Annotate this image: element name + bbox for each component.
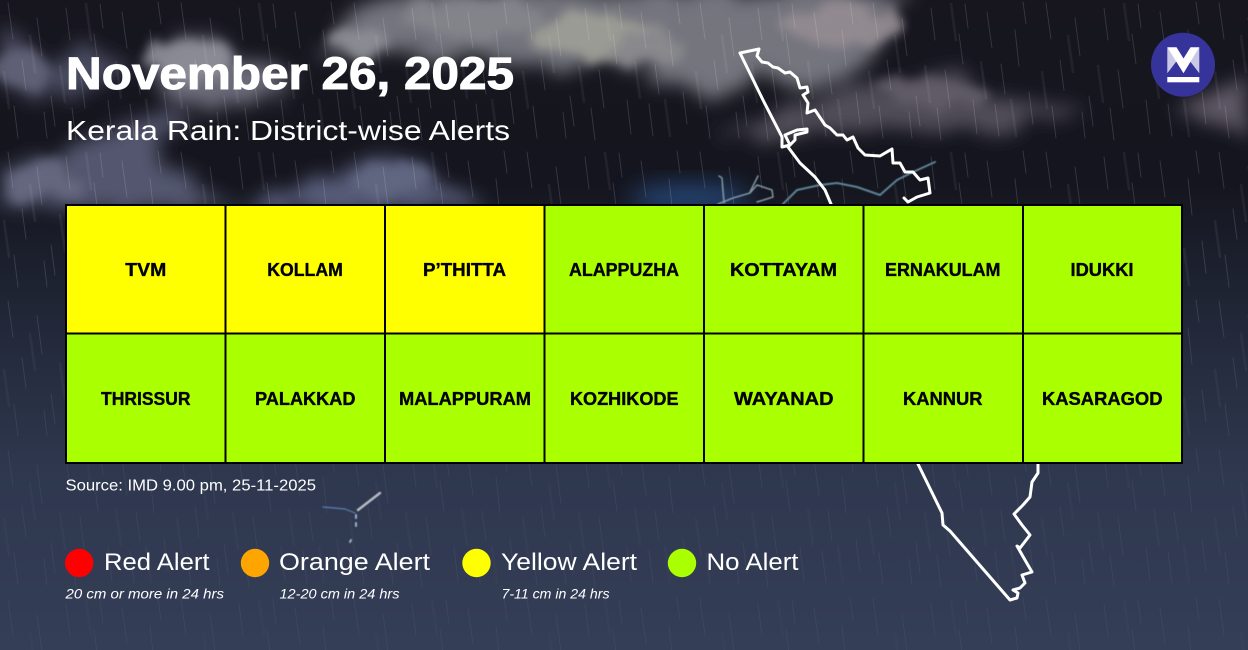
cell: Wayanad	[704, 334, 864, 463]
legend: red alert	[64, 549, 224, 602]
storm clouds: bright tops	[0, 0, 982, 198]
legend: orange alert: 12-20 cm in 24 hrs	[280, 586, 400, 602]
cell: Pathanamthitta: P’THITTA	[423, 260, 506, 280]
cell: Pathanamthitta	[385, 205, 544, 334]
lightning bolts	[323, 162, 935, 542]
legend: red alert: 20 cm or more in 24 hrs	[64, 586, 224, 602]
cell: Alappuzha: ALAPPUZHA	[569, 260, 679, 280]
cell: Kozhikode	[544, 334, 704, 463]
legend: orange alert: Orange Alert	[279, 549, 430, 576]
cell: Thrissur: THRISSUR	[101, 389, 190, 409]
map: Kerala outline	[740, 49, 1038, 600]
cell: Thrissur	[66, 334, 226, 463]
cell: Malappuram: MALAPPURAM	[399, 389, 531, 409]
cell: Malappuram	[385, 334, 544, 463]
cell: Kannur: KANNUR	[903, 389, 982, 409]
legend: yellow alert: 7-11 cm in 24 hrs	[502, 586, 610, 602]
cell: Idukki	[1023, 205, 1182, 334]
cell: Kozhikode: KOZHIKODE	[570, 389, 678, 409]
cell: Ernakulam: ERNAKULAM	[885, 260, 1000, 280]
cell: Kasaragod: KASARAGOD	[1042, 389, 1162, 409]
cell: Ernakulam	[864, 205, 1023, 334]
subtitle: Kerala Rain: District-wise Alerts	[66, 115, 510, 146]
cell: Kollam: KOLLAM	[267, 260, 343, 280]
cell: Palakkad: PALAKKAD	[255, 389, 356, 409]
legend: yellow alert: Yellow Alert	[501, 549, 637, 576]
cell: Kottayam	[704, 205, 864, 334]
cell: Kasaragod	[1023, 334, 1182, 463]
cell: Palakkad	[226, 334, 385, 463]
legend: yellow alert	[462, 549, 637, 602]
cell: Kottayam: KOTTAYAM	[730, 260, 837, 280]
cell: TVM: TVM	[125, 260, 166, 280]
legend: no alert	[668, 549, 799, 577]
legend: orange alert	[241, 549, 430, 602]
cell: Kannur	[864, 334, 1023, 463]
sky glow behind lightning	[630, 184, 750, 212]
source note: Source: IMD 9.00 pm, 25-11-2025	[66, 478, 316, 494]
storm clouds: broad masses	[0, 0, 1248, 210]
title: November 26, 2025	[66, 48, 514, 99]
logo: Manorama badge	[1151, 33, 1215, 97]
cell: Idukki: IDUKKI	[1070, 260, 1134, 280]
cell: Wayanad: WAYANAD	[734, 389, 834, 409]
alert table	[66, 205, 1182, 463]
legend: red alert: Red Alert	[104, 549, 210, 576]
legend	[64, 549, 799, 602]
cell: Alappuzha	[544, 205, 704, 334]
legend: no alert: No Alert	[706, 549, 799, 576]
cell: TVM	[66, 205, 226, 334]
cell: Kollam	[226, 205, 385, 334]
